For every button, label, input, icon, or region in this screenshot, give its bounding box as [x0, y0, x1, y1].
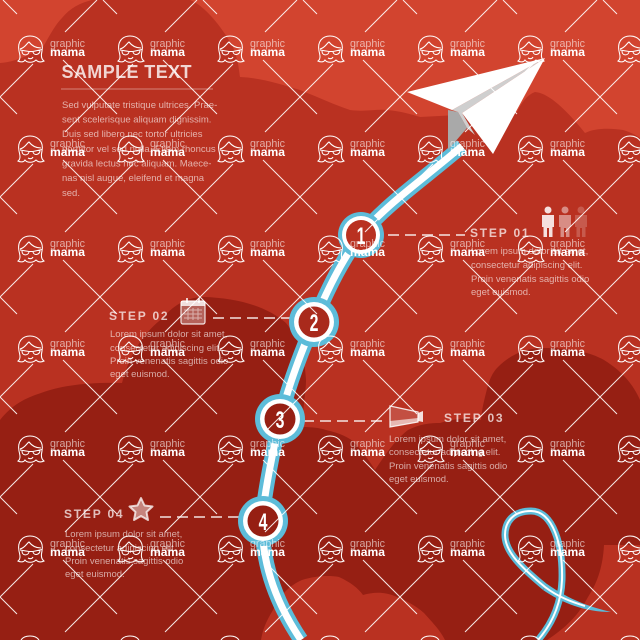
watermark: logos: mama — [550, 545, 585, 559]
ribbon loop with tail — [505, 511, 611, 640]
watermark: logos: mama — [150, 345, 185, 359]
step 1 block: eget euismod. — [471, 287, 531, 298]
marker 2 — [289, 297, 339, 347]
watermark: logos: mama — [550, 245, 585, 259]
intro text block — [62, 100, 217, 199]
step 1 block: Proin venenatis sagittis odio — [471, 274, 589, 285]
step 3 block: STEP 03 — [444, 411, 504, 425]
marker 2: 2 — [310, 311, 318, 337]
step 2 connector — [213, 317, 292, 319]
marker 3 — [255, 394, 305, 444]
watermark: logos: mama — [250, 345, 285, 359]
watermark: logos: mama — [450, 545, 485, 559]
step 1 block: Lorem ipsum dolor sit amet, — [471, 246, 588, 257]
watermark: logos: graphic — [50, 38, 85, 50]
watermark: logos: mama — [150, 45, 185, 59]
watermark: logos: mama — [50, 145, 85, 159]
marker 1: 1 — [357, 224, 365, 250]
watermark: logos: graphic — [450, 538, 485, 550]
watermark: logos: mama — [250, 245, 285, 259]
step 4 block: Lorem ipsum dolor sit amet, — [65, 529, 182, 540]
watermark: logos: graphic — [50, 138, 85, 150]
watermark: logos: mama — [50, 45, 85, 59]
watermark: logos: mama — [350, 345, 385, 359]
watermark: logos: mama — [50, 445, 85, 459]
step 4 connector — [160, 516, 245, 518]
watermark: logos: graphic — [450, 138, 485, 150]
intro text block: porttitor vel sed nulla. Etiam rhoncus — [62, 144, 216, 155]
icon: people — [542, 206, 587, 237]
marker 4 — [238, 496, 288, 546]
watermark: logos: mama — [350, 45, 385, 59]
watermark: logos: graphic — [250, 438, 285, 450]
step 4 block: STEP 04 — [64, 507, 124, 521]
watermark: logos: graphic — [350, 538, 385, 550]
watermark: logos: graphic — [50, 438, 85, 450]
marker 3: 3 — [276, 408, 284, 434]
step 3 connector — [303, 420, 385, 422]
intro text block: sent scelerisque aliquam dignissim. — [62, 114, 211, 126]
watermark: logos: mama — [550, 45, 585, 59]
watermark: logos: mama — [150, 445, 185, 459]
step 4 block: eget euismod. — [65, 569, 125, 580]
watermark: logos: graphic — [350, 38, 385, 50]
watermark: logos: graphic — [350, 238, 385, 250]
watermark: logos: graphic — [250, 538, 285, 550]
watermark: logos: mama — [550, 145, 585, 159]
step 2 block — [109, 309, 228, 380]
watermark: logos: mama — [250, 45, 285, 59]
watermark: logos: graphic — [350, 138, 385, 150]
intro text block: gravida lectus nec aliquam. Maece- — [62, 158, 211, 170]
step 1 block — [470, 226, 589, 298]
watermark: logos: mama — [50, 245, 85, 259]
icon: star — [130, 498, 152, 520]
watermark: logos: mama — [550, 445, 585, 459]
watermark: logos: graphic — [550, 338, 585, 350]
icon: calendar — [181, 298, 205, 324]
watermark: logos: mama — [150, 245, 185, 259]
step 3 block — [389, 411, 507, 485]
background: dark red cloud layer — [0, 297, 640, 640]
watermark: logos: graphic — [250, 138, 285, 150]
watermark: logos: graphic — [550, 238, 585, 250]
watermark: logos: graphic — [150, 238, 185, 250]
step 1 block: consectetur adipiscing elit. — [471, 260, 582, 271]
watermark: logos: mama — [250, 445, 285, 459]
watermark: logos: graphic — [150, 38, 185, 50]
flight path line — [262, 146, 462, 640]
paper plane — [407, 58, 545, 154]
watermark: logos: mama — [150, 545, 185, 559]
step 1 connector — [388, 234, 465, 236]
step 2 block: Proin venenatis sagittis odio — [110, 356, 228, 367]
watermark: logos: mama — [350, 545, 385, 559]
watermark: logos: graphic — [150, 338, 185, 350]
step 3 block: Proin venenatis sagittis odio — [389, 461, 507, 472]
watermark: logos: graphic — [150, 538, 185, 550]
watermark: logos: mama — [450, 145, 485, 159]
watermark: logos: mama — [250, 145, 285, 159]
step 4 block: Proin venenatis sagittis odio — [65, 556, 183, 567]
watermark: logos: graphic — [250, 238, 285, 250]
watermark: logos: mama — [550, 345, 585, 359]
watermark: logos: graphic — [450, 38, 485, 50]
intro text block: Sed vulputate tristique ultrices. Prae- — [62, 100, 217, 111]
watermark: logos: graphic — [50, 338, 85, 350]
intro text block: nas nisl augue, eleifend et magna — [62, 173, 205, 184]
watermark: logos: mama — [450, 445, 485, 459]
watermark: logos: graphic — [350, 438, 385, 450]
watermark: logos: mama — [50, 345, 85, 359]
watermark: logos: graphic — [150, 138, 185, 150]
step 2 block: STEP 02 — [109, 309, 169, 323]
watermark: logos: graphic — [250, 38, 285, 50]
background: bottom centre light cloud — [261, 576, 445, 640]
step 1 block: STEP 01 — [470, 226, 530, 240]
watermark: logos: graphic — [150, 438, 185, 450]
step 3 block: consectetur adipiscing elit. — [389, 447, 500, 458]
watermark: falling lattice lines from left edge — [0, 97, 543, 640]
step 2 block: consectetur adipiscing elit. — [110, 343, 221, 354]
watermark: logos: graphic — [50, 538, 85, 550]
watermark: logos: graphic — [550, 438, 585, 450]
watermark: logos: graphic — [450, 438, 485, 450]
watermark: logos: graphic — [450, 338, 485, 350]
step 3 block: Lorem ipsum dolor sit amet, — [389, 434, 506, 445]
watermark: logos: graphic — [350, 338, 385, 350]
watermark: logos: mama — [50, 545, 85, 559]
step 2 block: eget euismod. — [110, 369, 170, 380]
background: lower right light cloud — [547, 545, 640, 640]
watermark: logos: mama — [150, 145, 185, 159]
watermark: logos: graphic — [50, 238, 85, 250]
watermark: logos: mama — [250, 545, 285, 559]
step 4 block: consectetur adipiscing elit. — [65, 543, 176, 554]
intro text block: Duis sed libero nec tortor ultricies — [62, 129, 203, 140]
marker 4: 4 — [259, 510, 268, 536]
marker 1 — [338, 212, 384, 258]
watermark: logos: graphic — [550, 538, 585, 550]
step 4 block — [64, 507, 183, 580]
watermark: logos: mama — [450, 245, 485, 259]
watermark: logos: mama — [450, 345, 485, 359]
icon: megaphone — [390, 406, 423, 427]
watermark: logos: graphic — [250, 338, 285, 350]
watermark: logos: graphic — [550, 138, 585, 150]
step 3 block: eget euismod. — [389, 474, 449, 485]
watermark: logos: mama — [450, 45, 485, 59]
watermark: logos: mama — [350, 245, 385, 259]
watermark: logos: mama — [350, 445, 385, 459]
watermark: logos: graphic — [450, 238, 485, 250]
step 2 block: Lorem ipsum dolor sit amet, — [110, 329, 227, 340]
watermark: logos: graphic — [550, 38, 585, 50]
watermark: logos: mama — [350, 145, 385, 159]
title: SAMPLE TEXT — [62, 62, 192, 82]
intro text block: sed. — [62, 188, 80, 199]
